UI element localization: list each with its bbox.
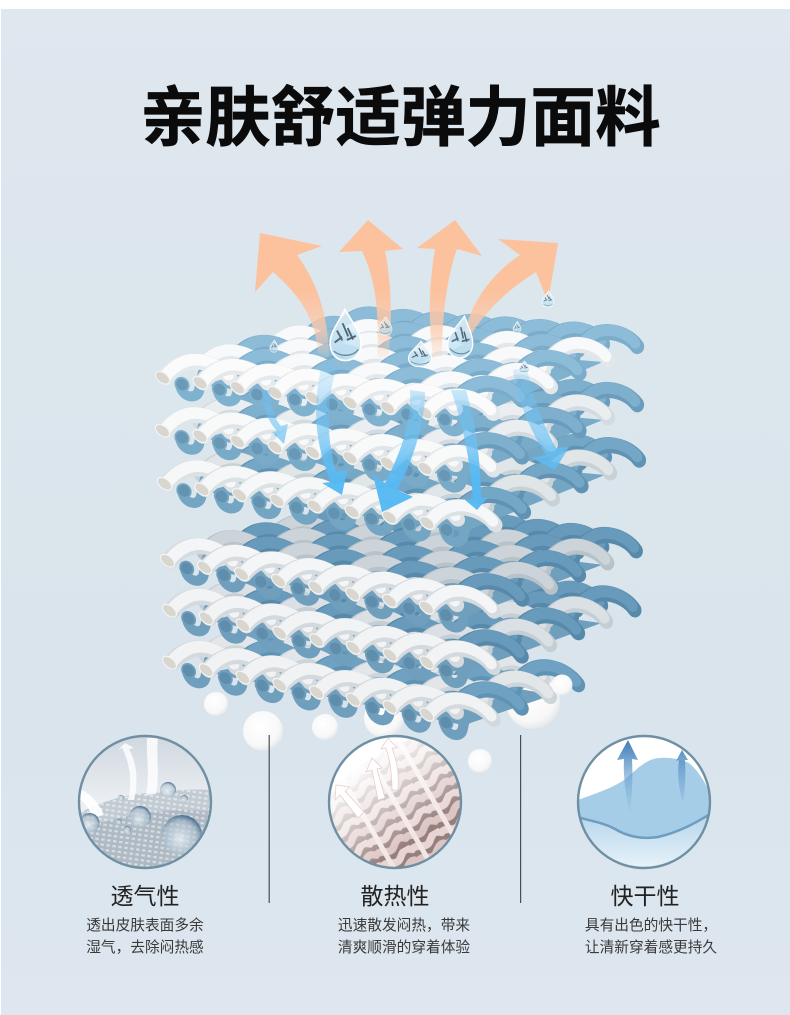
heat arrow 3 bbox=[417, 220, 482, 357]
description: breathability: 透出皮肤表面多余 bbox=[86, 918, 204, 934]
thumbnail: breathability bbox=[78, 735, 212, 870]
title: 亲肤舒适弹力面料 bbox=[140, 81, 660, 154]
main illustration: fabric, arrows, thumbnails bbox=[78, 220, 712, 903]
description: heat dissipation: 清爽顺滑的穿着体验 bbox=[338, 940, 470, 956]
description: heat dissipation bbox=[338, 917, 470, 956]
moisture arrow 4 bbox=[451, 390, 488, 510]
description: quick dry bbox=[585, 917, 717, 956]
description: breathability bbox=[86, 917, 204, 956]
heat arrows bbox=[255, 220, 558, 360]
fabric layer 3 bbox=[155, 416, 639, 550]
balls behind the fabric bbox=[204, 675, 560, 751]
description: quick dry: 让清新穿着感更持久 bbox=[585, 940, 717, 956]
droplet tiny 1 bbox=[513, 321, 521, 333]
ball beside circle bbox=[468, 749, 492, 773]
droplet round bbox=[408, 341, 432, 367]
heat arrow 2 bbox=[339, 220, 403, 360]
fabric layer 5 bbox=[161, 543, 634, 700]
divider left bbox=[269, 735, 270, 903]
fabric layer 1 bbox=[153, 310, 637, 437]
thumbnail: quick dry bbox=[578, 735, 712, 870]
heading: heat dissipation: 散热性 bbox=[360, 883, 430, 909]
moisture arrow 3 bbox=[373, 390, 425, 512]
heading: breathability: 透气性 bbox=[110, 883, 180, 909]
thumbnail: heat dissipation bbox=[329, 735, 463, 869]
fabric layer 2 bbox=[153, 363, 637, 495]
droplet faint bbox=[378, 317, 392, 335]
description: breathability: 湿气，去除闷热感 bbox=[86, 940, 204, 956]
heading: quick dry: 快干性 bbox=[610, 883, 680, 909]
divider right bbox=[520, 735, 521, 903]
droplet right bbox=[446, 315, 476, 359]
droplet falling bbox=[542, 291, 554, 307]
droplet large left bbox=[328, 308, 362, 362]
water droplets bbox=[270, 291, 554, 373]
woven fabric layers bbox=[153, 310, 639, 748]
moisture arrow 1 bbox=[262, 390, 288, 444]
fabric layer 6 bbox=[161, 613, 578, 748]
moisture arrow 2 bbox=[316, 365, 347, 495]
heat arrow 1 bbox=[255, 233, 329, 357]
heat arrow 4 bbox=[465, 239, 558, 333]
droplet tiny 2 bbox=[270, 340, 278, 352]
small ball in front bbox=[552, 674, 572, 696]
description: heat dissipation: 迅速散发闷热，带来 bbox=[338, 918, 470, 934]
droplet tiny 3 bbox=[518, 361, 530, 373]
moisture arrows bbox=[262, 365, 569, 512]
moisture arrow 5 bbox=[513, 368, 569, 470]
description: quick dry: 具有出色的快干性， bbox=[585, 918, 717, 934]
fabric layer 4 bbox=[158, 493, 636, 641]
